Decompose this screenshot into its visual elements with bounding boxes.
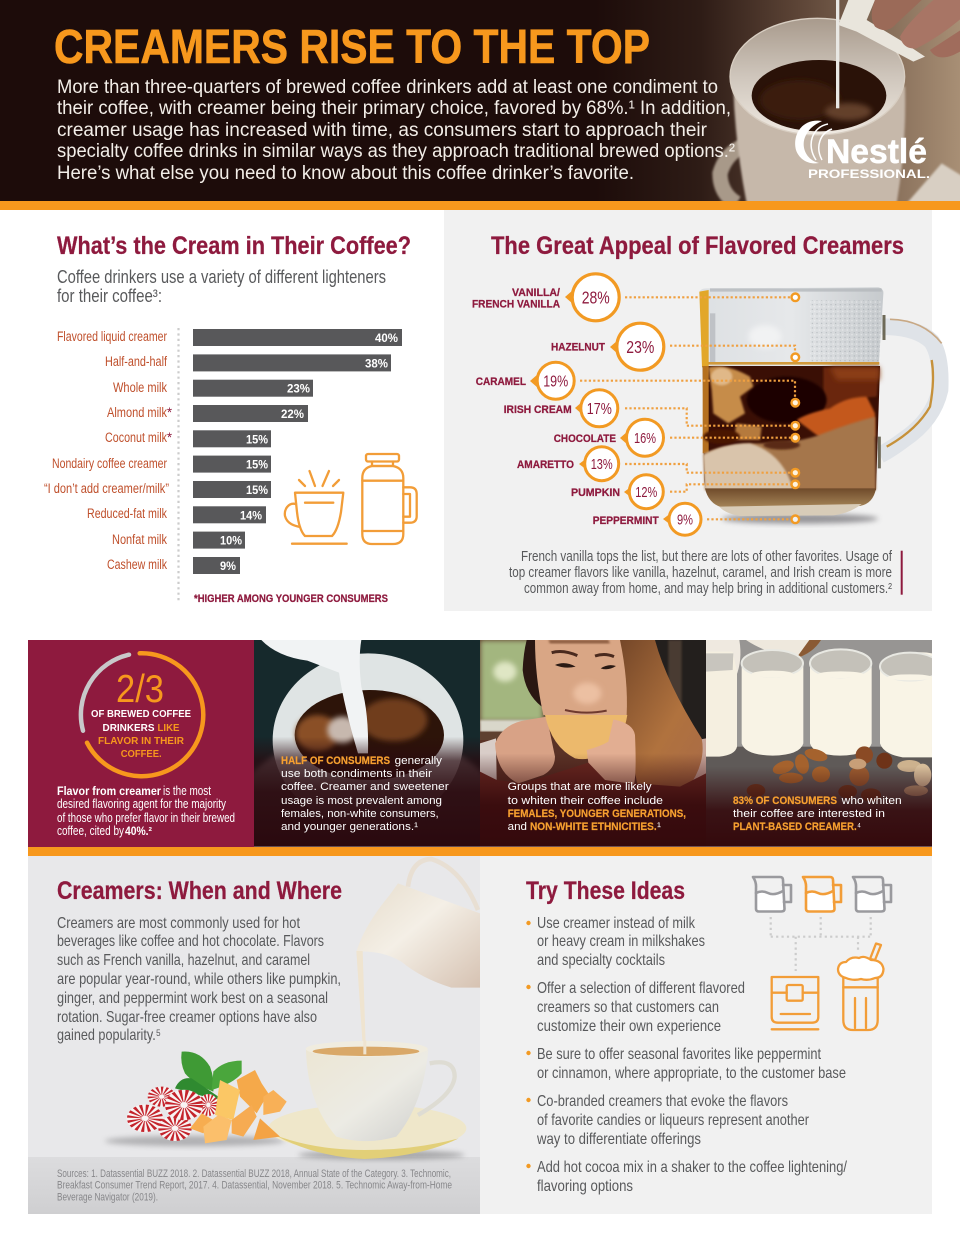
icon: cocktail glass: [772, 977, 818, 1029]
callout: chocolate 16%: 16%: [634, 430, 656, 447]
callout: vanilla 28%: [472, 274, 619, 321]
body text: rotation. Sugar-free creamer options have also: [57, 1009, 317, 1026]
panel: creamers when and where: [28, 856, 480, 1214]
caption text: coffee. Creamer and sweetener: [281, 781, 449, 793]
mug handle: [879, 315, 942, 468]
caption text: usage is most prevalent among: [281, 795, 442, 807]
intro paragraph: specialty coffee drinks in similar ways as they approach traditional brewed options.²: [57, 141, 735, 162]
intro paragraph: [57, 77, 735, 184]
intro paragraph: Here’s what else you need to know about this coffee drinker’s favorite.: [57, 163, 634, 184]
callout: hazelnut 23%: 23%: [626, 337, 654, 357]
caption text: who whiten: [841, 795, 902, 807]
callout: pumpkin 12%: [571, 475, 663, 509]
ring text: [91, 708, 191, 760]
bar chart: lighteners: 10%: [220, 534, 242, 548]
bar chart: lighteners: Nondairy coffee creamer: [52, 456, 167, 471]
caption text: females, non-white consumers,: [281, 808, 439, 820]
callout: amaretto 13%: [517, 447, 619, 481]
jars: [706, 649, 940, 757]
stat paragraph: 40%.²: [125, 826, 152, 838]
ring text: DRINKERS: [102, 722, 154, 734]
ring text: OF BREWED COFFEE: [91, 708, 191, 720]
icon: orange pitcher: [803, 877, 841, 912]
stat paragraph: is the most: [163, 783, 211, 798]
panel: try these ideas: [480, 856, 932, 1214]
idea 5: [526, 1159, 847, 1195]
peppermint candies: [122, 1087, 218, 1141]
callout: irish cream 17%: IRISH CREAM: [504, 404, 572, 416]
bar chart: lighteners: 38%: [365, 356, 388, 370]
bar chart: lighteners: Flavored liquid creamer: [57, 329, 167, 344]
callout: pumpkin 12%: PUMPKIN: [571, 487, 620, 499]
callout: chocolate 16%: [554, 419, 664, 456]
header photo: coffee cup with creamer: [720, 0, 960, 203]
header banner: [0, 0, 960, 203]
caption: [509, 549, 903, 597]
subtitle: [57, 267, 386, 306]
callout: pumpkin 12%: 12%: [635, 484, 657, 501]
caption text: and: [508, 821, 527, 833]
bar chart: lighteners: 23%: [287, 382, 310, 396]
stat paragraph: desired flavoring agent for the majority: [57, 796, 226, 811]
idea 4: [526, 1093, 810, 1148]
idea 4: of favorite candies or liqueurs represent another: [537, 1112, 810, 1129]
idea 1: or heavy cream in milkshakes: [537, 933, 705, 950]
orange divider: [28, 847, 932, 856]
panel: the great appeal of flavored creamers: [444, 210, 942, 611]
idea 2: [526, 980, 745, 1035]
photo panel: woman drinking coffee: [480, 640, 706, 847]
ring text: COFFEE.: [121, 748, 162, 760]
callout: vanilla 28%: FRENCH VANILLA: [472, 298, 560, 310]
callout: vanilla 28%: VANILLA/: [512, 287, 560, 299]
bar chart: lighteners: Half-and-half: [105, 354, 167, 369]
caption text: use both condiments in their: [281, 768, 432, 780]
heading: The Great Appeal of Flavored Creamers: [491, 232, 904, 260]
icon: Nestlé Professional logo: Nestlé: [826, 133, 927, 171]
photo: creamer pour, cup, peppermints and ginger: [105, 859, 480, 1160]
idea 2: Offer a selection of different flavored: [537, 980, 745, 997]
callout: hazelnut 23%: [551, 323, 664, 370]
callout: caramel 19%: 19%: [543, 374, 568, 390]
idea 1: [526, 915, 705, 969]
caption text: FEMALES, YOUNGER GENERATIONS,: [508, 808, 686, 820]
flavor callouts: [472, 274, 799, 535]
bar chart: lighteners: “I don’t add creamer/milk”: [44, 481, 169, 496]
sources: Breakfast Consumer Trend Report, 2017. 4. Datassential, November 2018. 5. Technomic Away-from-Home: [57, 1180, 452, 1192]
sources: Sources: 1. Datassential BUZZ 2018. 2. Datassential BUZZ 2018, Annual State of the Category. 3. Technomic,: [57, 1168, 451, 1180]
bar chart: lighteners: 22%: [281, 407, 304, 421]
caption text: Groups that are more likely: [508, 781, 652, 793]
icon: grey pitcher: [753, 877, 791, 912]
callout: peppermint 9%: 9%: [677, 512, 693, 528]
intro paragraph: their coffee, with creamer being their primary choice, favored by 68%.¹ In addition,: [57, 98, 731, 119]
bar chart: lighteners: 15%: [246, 483, 268, 497]
caption text: [733, 795, 902, 833]
stat panel: two-thirds: [28, 640, 254, 847]
idea 3: [526, 1046, 846, 1082]
idea 5: Add hot cocoa mix in a shaker to the coffee lightening/: [537, 1159, 847, 1176]
big number: 2/3: [116, 668, 164, 711]
callout: vanilla 28%: 28%: [582, 288, 610, 308]
bar chart: lighteners: 15%: [246, 432, 268, 446]
callout: irish cream 17%: 17%: [587, 401, 612, 418]
stat paragraph: Flavor from creamer: [57, 786, 161, 798]
heading: What’s the Cream in Their Coffee?: [57, 232, 411, 260]
bar chart: lighteners: Cashew milk: [107, 557, 167, 572]
sources: Beverage Navigator (2019).: [57, 1192, 158, 1204]
heading: Try These Ideas: [526, 877, 685, 905]
body text: ginger, and peppermint work best on a seasonal: [57, 990, 328, 1007]
callout: amaretto 13%: AMARETTO: [517, 459, 574, 471]
caption text: to whiten their coffee include: [508, 795, 663, 807]
caption text: their coffee are interested in: [733, 808, 885, 820]
photo panel: plant-based milk jars: [706, 640, 940, 847]
bar chart: lighteners: *: [167, 430, 173, 445]
nuts: [747, 746, 931, 802]
ring chart: 2/3: [81, 653, 203, 776]
caption text: generally: [395, 755, 443, 767]
body text: such as French vanilla, hazelnut, and caramel: [57, 952, 310, 969]
body text: Creamers are most commonly used for hot: [57, 915, 300, 932]
stat paragraph: coffee, cited by: [57, 823, 124, 838]
panel: what's the cream in their coffee: [44, 232, 417, 605]
shadows: [105, 1136, 285, 1146]
candied ginger: [190, 1070, 287, 1143]
caption text: ⁴: [857, 821, 861, 833]
candies and ginger: [122, 1052, 287, 1143]
idea 3: Be sure to offer seasonal favorites like peppermint: [537, 1046, 821, 1063]
idea 2: creamers so that customers can: [537, 999, 719, 1016]
callout: amaretto 13%: 13%: [591, 456, 613, 473]
idea 4: Co-branded creamers that evoke the flavors: [537, 1093, 788, 1110]
body text: gained popularity.⁵: [57, 1027, 161, 1044]
caption text: HALF OF CONSUMERS: [281, 755, 390, 767]
ring text: LIKE: [158, 722, 180, 734]
heading: Creamers: When and Where: [57, 877, 342, 905]
callout: chocolate 16%: CHOCOLATE: [554, 433, 616, 445]
photo panel: milk pouring into coffee: [234, 640, 501, 893]
stat paragraph: of those who prefer flavor in their brewed: [57, 810, 235, 825]
bar chart: lighteners: Whole milk: [113, 380, 167, 395]
bar chart: lighteners: 40%: [375, 331, 398, 345]
mint leaves: [175, 1052, 242, 1100]
idea 1: Use creamer instead of milk: [537, 915, 696, 932]
creamer pitcher: [356, 859, 480, 1055]
saucer: [268, 1104, 466, 1152]
bar chart: lighteners: Almond milk: [107, 405, 167, 420]
orange divider: [0, 201, 960, 210]
body text: beverages like coffee and hot chocolate. Flavors: [57, 933, 324, 950]
sources: [28, 1157, 480, 1214]
subtitle: Coffee drinkers use a variety of different lighteners: [57, 267, 386, 287]
icon: grey pitcher: [853, 877, 891, 912]
bar chart: lighteners: *: [167, 405, 173, 420]
caption text: PLANT-BASED CREAMER.: [733, 821, 857, 833]
callout: peppermint 9%: [593, 503, 701, 535]
ring text: FLAVOR IN THEIR: [98, 735, 184, 747]
icon: coffee cup: [285, 471, 347, 544]
idea 2: customize their own experience: [537, 1018, 721, 1035]
subtitle: for their coffee³:: [57, 286, 162, 306]
icon: Nestlé Professional logo: PROFESSIONAL.: [808, 169, 930, 181]
coffee layers: [703, 366, 880, 516]
bar chart: lighteners: 15%: [246, 458, 268, 472]
idea 3: or cinnamon, where appropriate, to the customer base: [537, 1065, 846, 1082]
footnote: *HIGHER AMONG YOUNGER CONSUMERS: [194, 593, 388, 605]
intro paragraph: creamer usage has increased with time, as consumers start to approach their: [57, 120, 708, 141]
icon: Nestlé Professional logo: [795, 121, 930, 181]
circle pointers: [530, 290, 671, 525]
callout: irish cream 17%: [504, 390, 618, 427]
caption text: NON-WHITE ETHNICITIES.: [530, 821, 657, 833]
caption text: ¹: [657, 821, 661, 833]
icon: thermos: [362, 454, 417, 544]
idea 1: and specialty cocktails: [537, 952, 665, 969]
caption text: 83% OF CONSUMERS: [733, 795, 837, 807]
stat paragraph: [57, 783, 235, 838]
bar chart: lighteners: Coconut milk: [105, 430, 167, 445]
callout: caramel 19%: [476, 362, 574, 399]
cup: [306, 1040, 455, 1141]
body text: [57, 915, 341, 1044]
idea 5: flavoring options: [537, 1178, 633, 1195]
markers: [792, 294, 799, 523]
idea 4: way to differentiate offerings: [536, 1131, 701, 1148]
bar chart: lighteners: [44, 329, 402, 574]
icon: dotted connectors: [771, 917, 871, 971]
caption text: [281, 755, 449, 833]
body text: are popular year-round, while others like pumpkin,: [57, 971, 341, 988]
photo: glass mug of coffee with creamer: [699, 287, 942, 524]
caption text: [508, 781, 686, 833]
intro paragraph: More than three-quarters of brewed coffee drinkers add at least one condiment to: [57, 77, 718, 98]
bar chart: lighteners: Reduced-fat milk: [87, 506, 167, 521]
icon: milkshake: [838, 944, 884, 1030]
connector lines: [580, 297, 795, 519]
callout: hazelnut 23%: HAZELNUT: [551, 342, 605, 354]
caption text: and younger generations.¹: [281, 821, 418, 833]
callout: peppermint 9%: PEPPERMINT: [593, 515, 659, 527]
bar chart: lighteners: Nonfat milk: [112, 532, 167, 547]
callout: caramel 19%: CARAMEL: [476, 376, 526, 388]
title: CREAMERS RISE TO THE TOP: [54, 21, 650, 74]
bar chart: lighteners: 14%: [240, 508, 262, 522]
bar chart: lighteners: 9%: [220, 559, 236, 573]
